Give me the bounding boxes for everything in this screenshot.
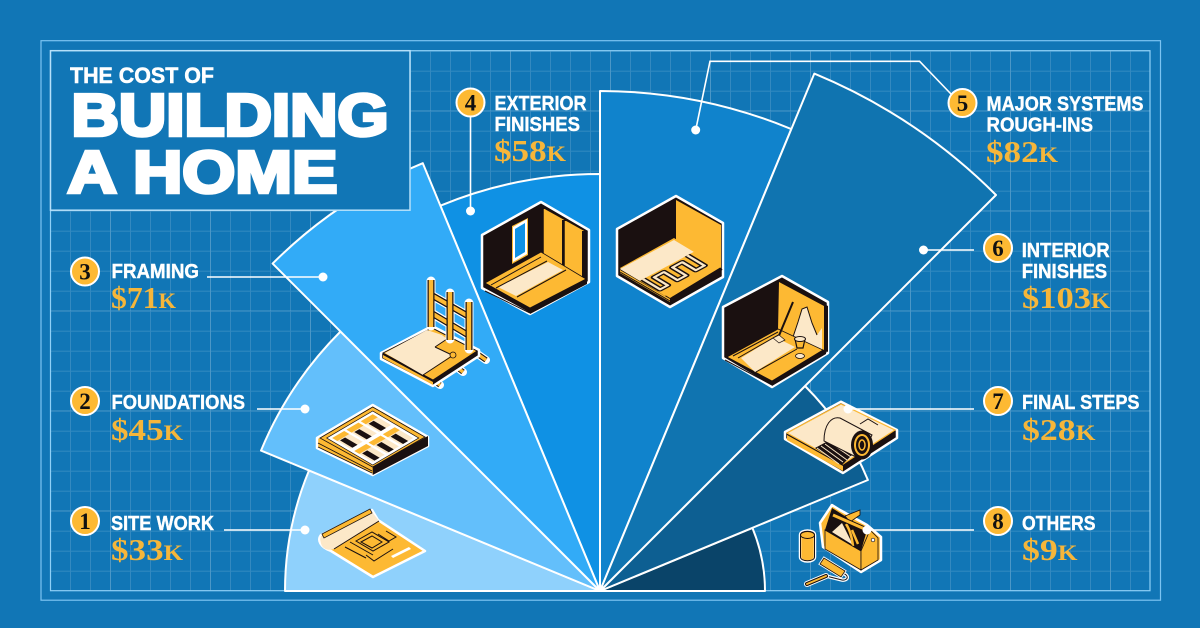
callout 1: site work: $33 K	[111, 532, 183, 567]
wedge 1: site work	[285, 470, 600, 591]
callout 5: major systems rough-ins	[691, 61, 1144, 169]
title small line: THE COST OF	[70, 63, 214, 88]
callout 7: final steps: $28 K	[1022, 412, 1096, 447]
icon: toolbox and paint	[800, 505, 881, 584]
callout 6: interior finishes: $103 K	[1022, 280, 1110, 315]
wedge 8: others	[600, 528, 765, 591]
icon: framing	[381, 280, 486, 386]
icon: flooring roll	[785, 402, 897, 473]
wedge 6: interior finishes	[600, 74, 996, 591]
callout 4: exterior finishes: $58 K	[494, 133, 566, 168]
callout 2: foundations: 2	[79, 389, 91, 414]
callout 8: others: 8	[992, 509, 1004, 534]
fan chart of cost wedges	[261, 74, 996, 591]
callout 6: interior finishes	[919, 234, 1110, 315]
wedge 7: final steps	[600, 386, 868, 591]
callout 4: exterior finishes: EXTERIOR	[494, 93, 587, 115]
callout 7: final steps	[844, 387, 1140, 447]
icon: interior finishes room	[723, 276, 828, 387]
callout 7: final steps: FINAL STEPS	[1022, 392, 1140, 414]
callout 8: others: OTHERS	[1022, 513, 1096, 535]
wedge 4: exterior finishes	[440, 174, 600, 591]
callout 2: foundations	[71, 387, 310, 447]
callout 5: major systems rough-ins: ROUGH-INS	[986, 115, 1093, 137]
callout 5: major systems rough-ins: 5	[957, 91, 968, 116]
callout 6: interior finishes: 6	[992, 236, 1004, 261]
callout 4: exterior finishes	[456, 88, 587, 216]
title main line 1: BUILDING	[72, 82, 388, 148]
title panel	[50, 51, 410, 210]
icon: radiant heating room	[617, 196, 723, 307]
callout 3: framing: $71K	[111, 280, 176, 315]
wedge 2: foundations	[261, 332, 600, 591]
callout 8: others	[862, 507, 1096, 567]
wedge 5: major systems	[600, 91, 791, 591]
callout 5: major systems rough-ins: $82 K	[986, 134, 1058, 169]
callout 2: foundations: $45 K	[111, 412, 183, 447]
icon: exterior finishes room	[482, 202, 589, 314]
callout 7: final steps: 7	[992, 389, 1004, 414]
wedge 3: framing	[273, 163, 600, 591]
callout 3: framing: FRAMING	[112, 261, 199, 283]
callout 3: framing: 3	[79, 260, 91, 284]
callout 4: exterior finishes: FINISHES	[494, 114, 580, 136]
icon: foundations grid	[317, 405, 428, 475]
callout 6: interior finishes: INTERIOR	[1022, 240, 1110, 262]
callout 8: others: $9K	[1022, 532, 1078, 567]
callout 3: framing	[71, 258, 328, 315]
callout 4: exterior finishes: 4	[465, 90, 477, 116]
callout 1: site work	[71, 507, 310, 567]
callout 1: site work: 1	[79, 509, 91, 534]
callout 5: major systems rough-ins: MAJOR SYSTEMS	[986, 94, 1144, 116]
callout 2: foundations: FOUNDATIONS	[112, 392, 245, 414]
callout 1: site work: SITE WORK	[111, 513, 214, 535]
title main line 2: A HOME	[68, 140, 338, 206]
callout 6: interior finishes: FINISHES	[1022, 261, 1107, 283]
icon: blueprint roll	[319, 509, 425, 577]
